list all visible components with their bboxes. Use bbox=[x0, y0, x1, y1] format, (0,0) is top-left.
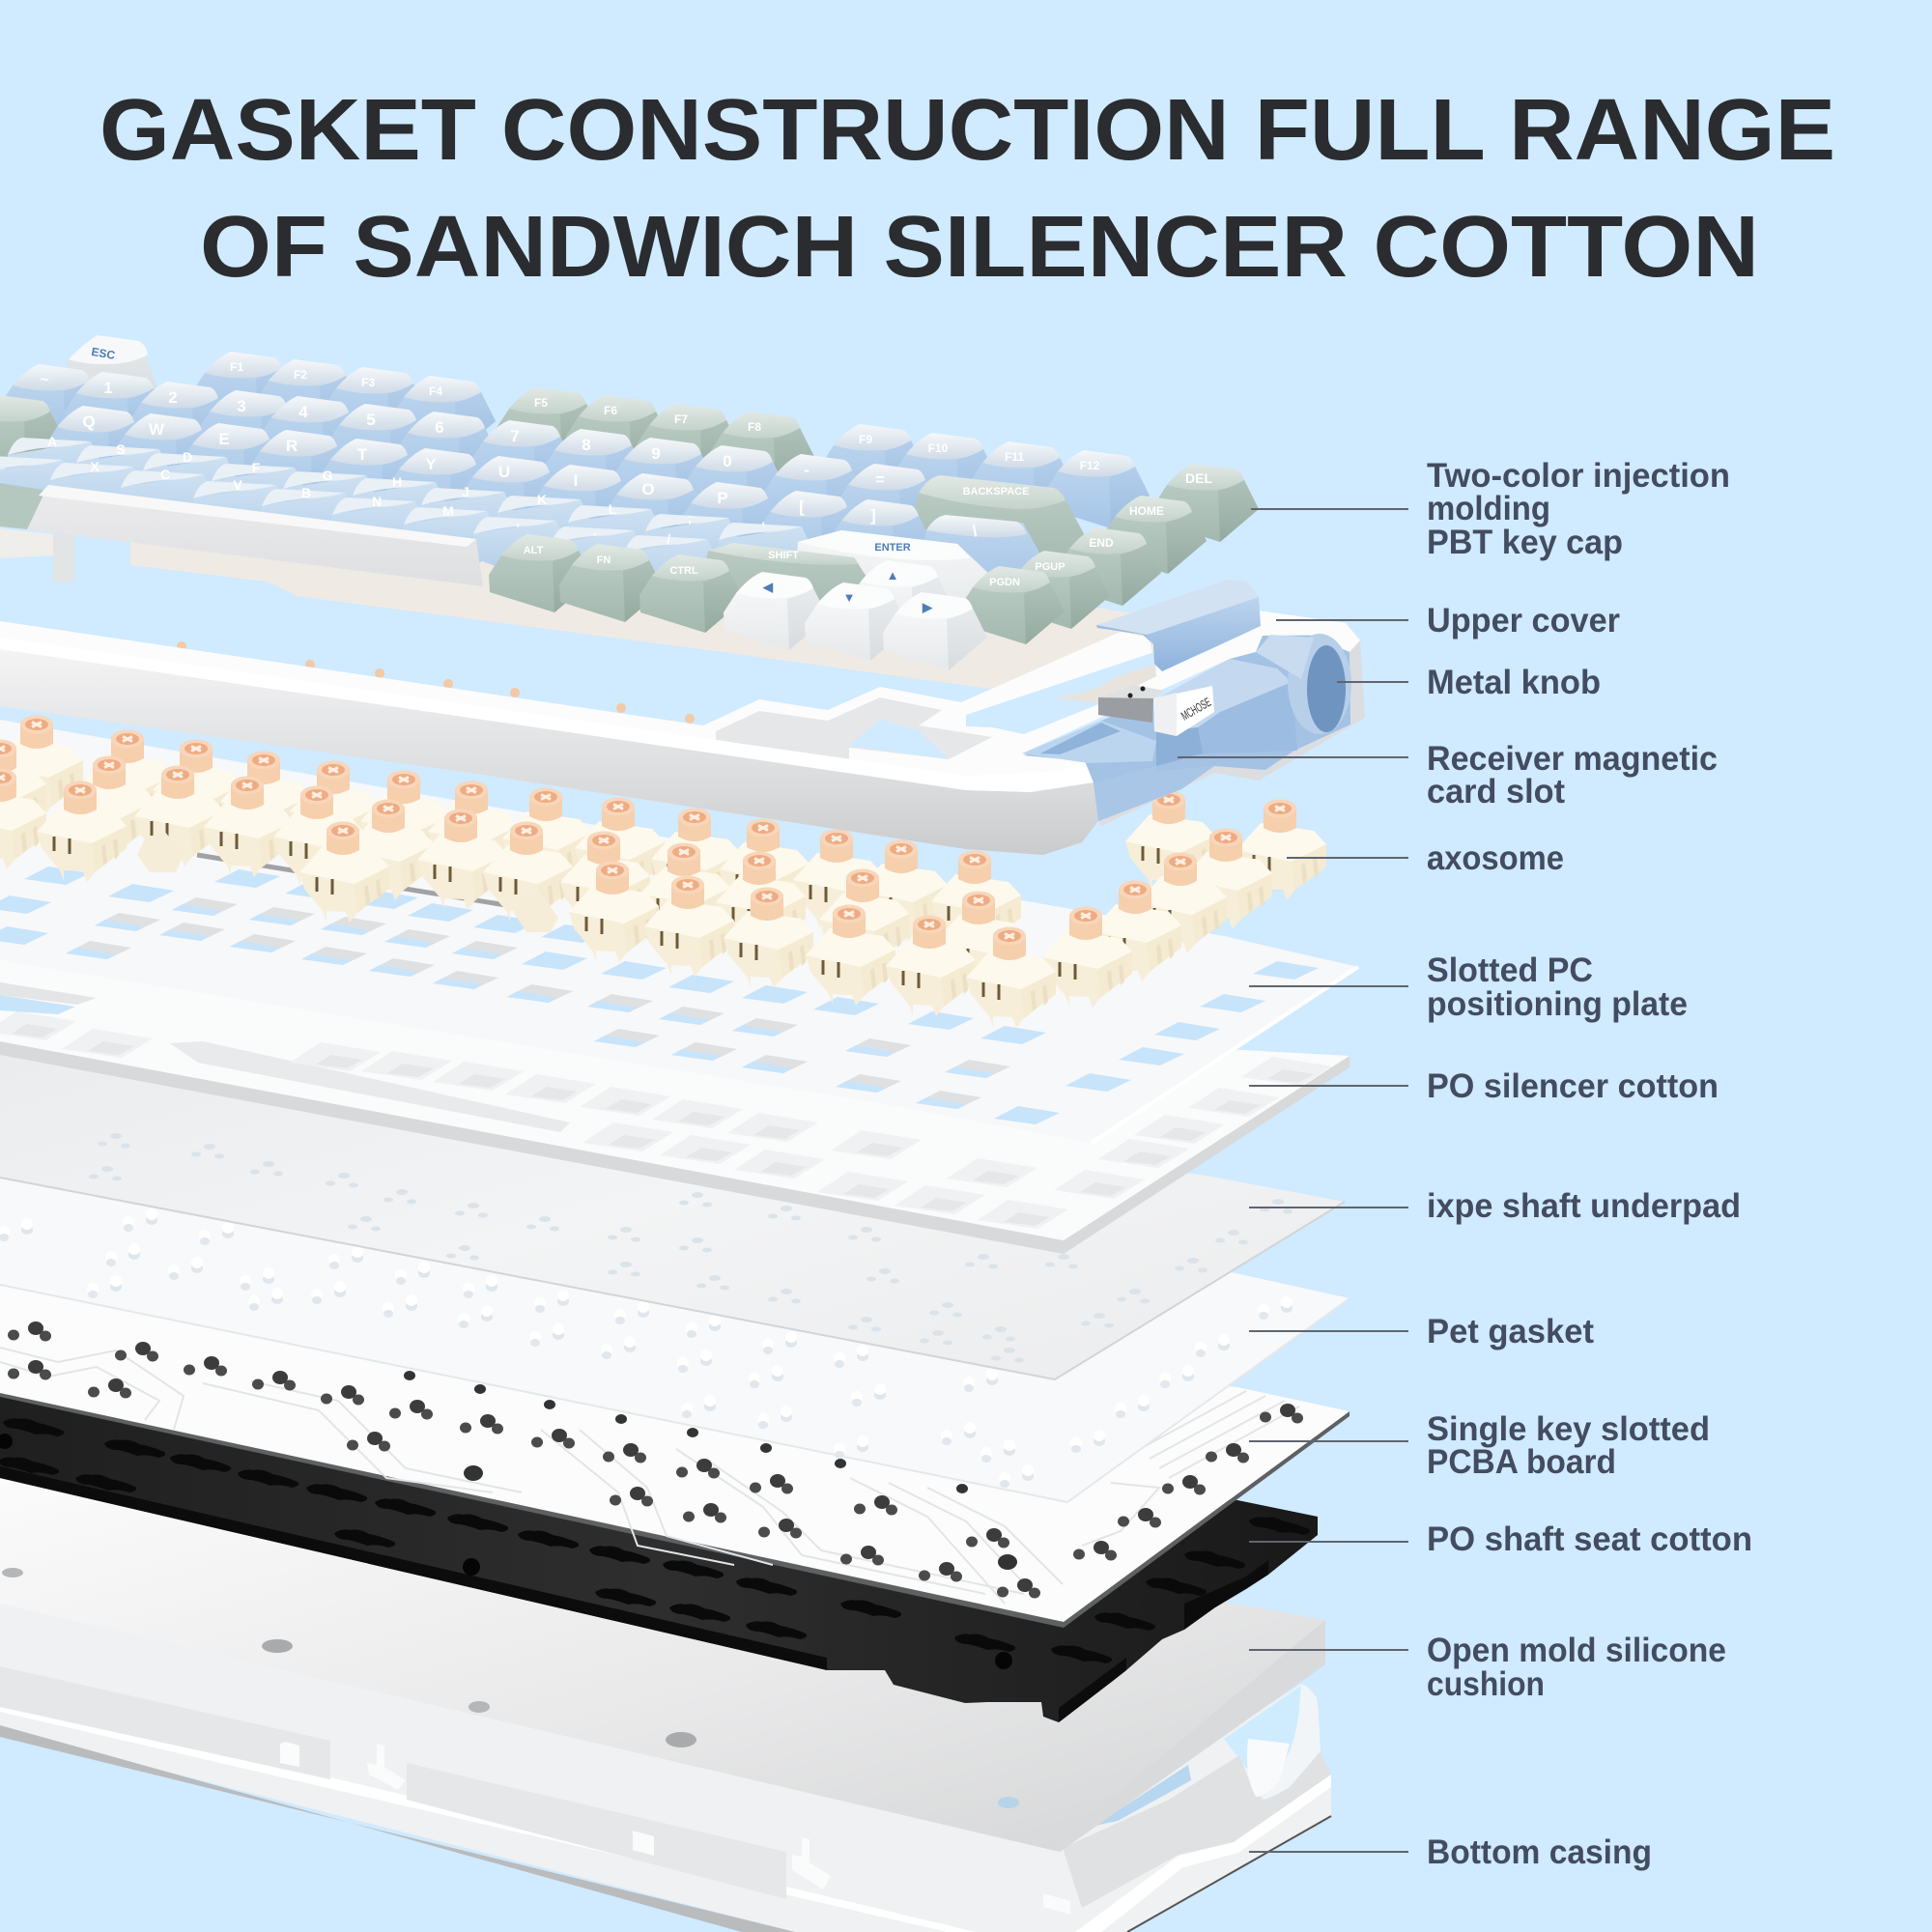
qwerty row keys: T bbox=[357, 445, 368, 464]
home row keys: G bbox=[323, 468, 333, 483]
qwerty row keys: W bbox=[149, 420, 165, 439]
bottom letter row keys: X bbox=[90, 459, 99, 474]
function row keys bbox=[0, 335, 1259, 542]
bottom modifier keys: PGDN bbox=[989, 577, 1020, 588]
label: PO silencer: PO silencer cotton bbox=[1427, 1067, 1719, 1105]
qwerty row keys: O bbox=[641, 480, 655, 498]
label: card slot: card slot bbox=[1427, 773, 1565, 810]
ixpe shaft underpad layer bbox=[0, 1014, 1345, 1379]
label: silicone bbox=[1427, 1632, 1726, 1703]
label: PCBA: Single key slotted bbox=[1427, 1410, 1710, 1448]
bottom letter row keys: M bbox=[442, 503, 454, 519]
label: key cap: molding bbox=[1427, 490, 1550, 527]
arrow keys: ▼ bbox=[843, 590, 855, 605]
label: PC plate bbox=[1427, 952, 1688, 1023]
function row keys: F7 bbox=[674, 412, 688, 426]
number row keys: - bbox=[804, 461, 810, 479]
function row keys: F10 bbox=[928, 441, 949, 455]
leader lines bbox=[1178, 509, 1408, 1852]
number row keys: 4 bbox=[298, 403, 308, 421]
stabilizer housings bbox=[137, 831, 558, 932]
key plate underside bbox=[130, 541, 1164, 699]
label: card slot bbox=[1427, 740, 1718, 810]
qwerty row keys bbox=[0, 395, 1044, 598]
bottom letter row keys: N bbox=[372, 494, 382, 509]
PO silencer cotton layer bbox=[0, 869, 1350, 1254]
bottom modifier keys: ALT bbox=[524, 545, 544, 556]
home row keys: ' bbox=[761, 519, 765, 534]
label: key cap bbox=[1427, 457, 1730, 561]
USB receiver: MCHOSE bbox=[1179, 695, 1213, 724]
label: key cap: Two-color injection bbox=[1427, 457, 1730, 495]
function row keys: F6 bbox=[604, 404, 617, 417]
qwerty row keys: Q bbox=[82, 412, 96, 431]
function row keys: F8 bbox=[748, 420, 761, 434]
number row keys bbox=[64, 372, 1087, 573]
title bbox=[99, 82, 1835, 296]
title: GASKET CONSTRUCTION FULL RANGE bbox=[99, 82, 1835, 179]
home row keys: F bbox=[252, 460, 261, 475]
label: pet gasket: Pet gasket bbox=[1427, 1313, 1594, 1350]
navigation keys: HOME bbox=[1129, 504, 1164, 518]
stem tips seen through frame bbox=[177, 641, 695, 724]
icon: metal knob bbox=[1256, 634, 1351, 734]
label: bottom casing: Bottom casing bbox=[1427, 1833, 1652, 1871]
number row keys: 5 bbox=[366, 411, 376, 429]
home row keys: A bbox=[47, 434, 57, 449]
stabilizer wire bbox=[197, 855, 518, 907]
exploded keyboard illustration bbox=[0, 335, 1365, 1932]
upper cover frame bbox=[0, 621, 1241, 855]
bottom casing layer bbox=[0, 1584, 1331, 1932]
home row keys: J bbox=[462, 484, 469, 499]
function row keys: F1 bbox=[230, 360, 243, 374]
function row keys: F4 bbox=[429, 384, 442, 398]
label: axosome: axosome bbox=[1427, 839, 1564, 877]
function row keys: F11 bbox=[1005, 450, 1024, 464]
home row keys: D bbox=[183, 449, 192, 465]
number row keys: 8 bbox=[582, 436, 591, 454]
switches layer bbox=[0, 715, 1326, 1028]
bottom modifier keys bbox=[489, 534, 1110, 644]
qwerty row keys: U bbox=[498, 463, 510, 481]
label: ixpe: ixpe shaft underpad bbox=[1427, 1187, 1741, 1225]
navigation keys: END bbox=[1089, 536, 1114, 550]
bottom letter row keys: . bbox=[593, 523, 597, 538]
number row keys: = bbox=[875, 470, 885, 489]
label: silicone: Open mold silicone bbox=[1427, 1632, 1726, 1669]
function row keys: ~ bbox=[40, 372, 49, 388]
title: OF SANDWICH SILENCER COTTON bbox=[200, 199, 1759, 296]
qwerty row keys: [ bbox=[799, 497, 805, 516]
function row keys: F2 bbox=[294, 368, 307, 382]
arrow keys bbox=[724, 560, 987, 670]
bottom letter row keys: , bbox=[516, 513, 520, 528]
number row keys: 6 bbox=[435, 418, 444, 437]
bottom modifier keys: CTRL bbox=[669, 565, 698, 577]
label: PO shaft: PO shaft seat cotton bbox=[1427, 1520, 1752, 1558]
keycaps layer bbox=[0, 335, 1259, 670]
arrow keys: ▲ bbox=[887, 568, 898, 582]
bottom modifier keys: FN bbox=[597, 554, 611, 566]
home row keys: K bbox=[537, 492, 547, 507]
label: PCBA: PCBA board bbox=[1427, 1443, 1616, 1481]
label: upper cover: Upper cover bbox=[1427, 602, 1620, 639]
number row keys: 0 bbox=[723, 452, 732, 470]
number row keys: 2 bbox=[168, 388, 178, 407]
home row keys: ; bbox=[688, 510, 692, 526]
qwerty row keys: \ bbox=[973, 522, 978, 540]
bottom letter row keys: B bbox=[301, 485, 311, 500]
navigation keys: ENTER bbox=[874, 542, 911, 554]
arrow keys: ▶ bbox=[922, 600, 933, 614]
home row keys: H bbox=[392, 474, 402, 490]
blue magnetic cover bbox=[1096, 580, 1261, 671]
bottom letter row keys: / bbox=[667, 531, 670, 547]
keyboard post bbox=[53, 534, 74, 582]
bottom letter row keys bbox=[0, 456, 867, 622]
function row keys: ESC bbox=[90, 345, 117, 362]
qwerty row keys: E bbox=[218, 430, 230, 448]
label: PCBA bbox=[1427, 1410, 1710, 1481]
spacebar bbox=[27, 485, 483, 586]
PO shaft seat cotton layer bbox=[0, 1391, 1318, 1722]
label: PC plate: Slotted PC bbox=[1427, 952, 1593, 989]
function row keys: F3 bbox=[361, 376, 375, 389]
number row keys: 9 bbox=[651, 444, 661, 463]
home row keys bbox=[4, 434, 816, 588]
label: card slot: Receiver magnetic bbox=[1427, 740, 1718, 778]
bottom letter row keys: C bbox=[160, 467, 170, 482]
number row keys: 3 bbox=[237, 397, 246, 415]
label: PC plate: positioning plate bbox=[1427, 985, 1688, 1023]
label: silicone: cushion bbox=[1427, 1665, 1545, 1703]
qwerty row keys: P bbox=[717, 489, 728, 507]
blue receiver module bbox=[1022, 611, 1365, 826]
part labels bbox=[1427, 457, 1752, 1871]
bottom modifier keys: PGUP bbox=[1035, 561, 1065, 573]
qwerty row keys: R bbox=[286, 437, 298, 455]
label: metal knob: Metal knob bbox=[1427, 664, 1601, 701]
bottom letter row keys: V bbox=[233, 477, 242, 493]
function row keys: F5 bbox=[534, 396, 548, 410]
qwerty row keys: Y bbox=[425, 455, 437, 473]
key plate left strip bbox=[0, 528, 53, 558]
USB receiver bbox=[1098, 685, 1214, 736]
qwerty row keys: I bbox=[574, 471, 578, 490]
left edge modifier key bbox=[0, 483, 48, 529]
home row keys: S bbox=[116, 441, 126, 457]
number row keys: 1 bbox=[103, 379, 113, 397]
bottom letter row keys: SHIFT bbox=[768, 550, 799, 561]
number row keys: BACKSPACE bbox=[963, 486, 1029, 497]
function row keys: F12 bbox=[1080, 459, 1100, 472]
PCBA board layer bbox=[0, 1275, 1350, 1628]
navigation keys bbox=[796, 496, 1207, 614]
function row keys: F9 bbox=[859, 433, 872, 446]
Pet gasket layer bbox=[0, 1140, 1350, 1502]
number row keys: 7 bbox=[510, 427, 520, 445]
PC positioning plate layer bbox=[0, 720, 1358, 1143]
qwerty row keys: ] bbox=[870, 506, 876, 525]
silicone cushion layer bbox=[0, 1478, 1325, 1852]
label: key cap: PBT key cap bbox=[1427, 524, 1623, 561]
arrow keys: ◀ bbox=[762, 580, 774, 594]
function row keys: DEL bbox=[1185, 470, 1212, 486]
home row keys: L bbox=[609, 501, 617, 517]
